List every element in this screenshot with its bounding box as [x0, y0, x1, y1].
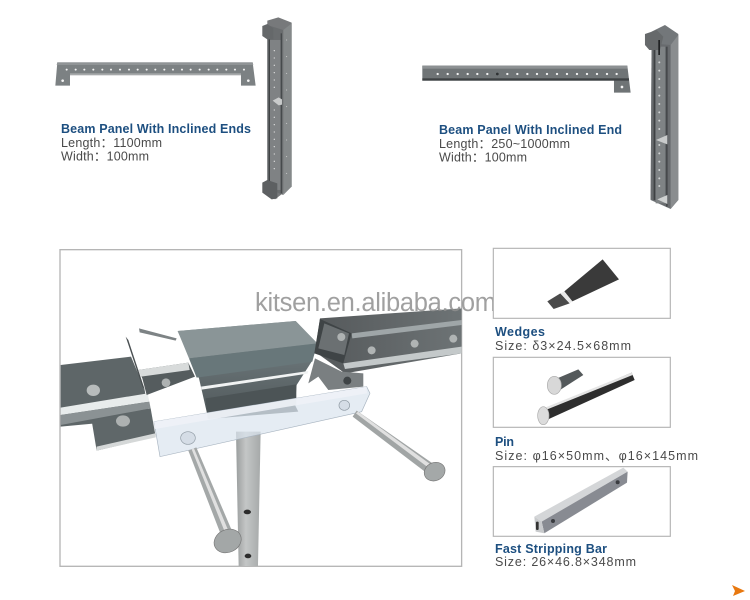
watermark: kitsen.en.alibaba.com [255, 289, 496, 317]
text: beam panel with inclined end: Width：100mm [439, 150, 527, 164]
text: fast stripping bar: Fast Stripping Bar [495, 542, 607, 556]
text: wedges: Wedges [495, 325, 545, 339]
centre box beam [178, 321, 317, 419]
centre rail [138, 363, 195, 395]
text: beam panel with inclined end [439, 123, 622, 164]
text: beam panel with inclined end: Length：250~1000mm [439, 137, 570, 151]
text: beam panel with inclined ends: Width：100mm [61, 150, 149, 164]
text: pin: Size: φ16×50mm、φ16×145mm [495, 449, 698, 463]
left beam [61, 337, 156, 451]
text: beam panel with inclined ends [61, 122, 251, 164]
text: pin: Pin [495, 435, 514, 449]
column drawing, left [262, 17, 292, 199]
vertical post [236, 432, 261, 566]
panel: wedges [493, 248, 670, 318]
beam panel with inclined end drawing [422, 66, 631, 93]
icon: wedge [547, 259, 619, 309]
right pin [353, 411, 448, 484]
beam panel with inclined ends drawing [55, 62, 256, 86]
left pin [188, 447, 245, 557]
panel: pin [493, 357, 670, 427]
panel: assembly illustration [60, 250, 462, 566]
transparent clamp plate [154, 387, 370, 457]
text: wedges: Size: δ3×24.5×68mm [495, 339, 631, 353]
text: beam panel with inclined ends: Beam Panel With Inclined Ends [61, 122, 251, 136]
text: pin [495, 435, 698, 463]
text: beam panel with inclined ends: Length：1100mm [61, 136, 162, 150]
text: wedges [495, 325, 631, 353]
text: beam panel with inclined end: Beam Panel With Inclined End [439, 123, 622, 137]
icon: short pin [547, 369, 583, 394]
panel: fast stripping bar [493, 467, 670, 536]
text: fast stripping bar: Size: 26×46.8×348mm [495, 555, 636, 569]
text: fast stripping bar [495, 542, 636, 569]
thin wedge [139, 328, 177, 341]
right beam [308, 308, 462, 390]
column drawing, right [645, 25, 678, 209]
icon: stripping bar [534, 468, 628, 533]
icon: long pin [538, 373, 635, 425]
arrow [732, 585, 745, 596]
